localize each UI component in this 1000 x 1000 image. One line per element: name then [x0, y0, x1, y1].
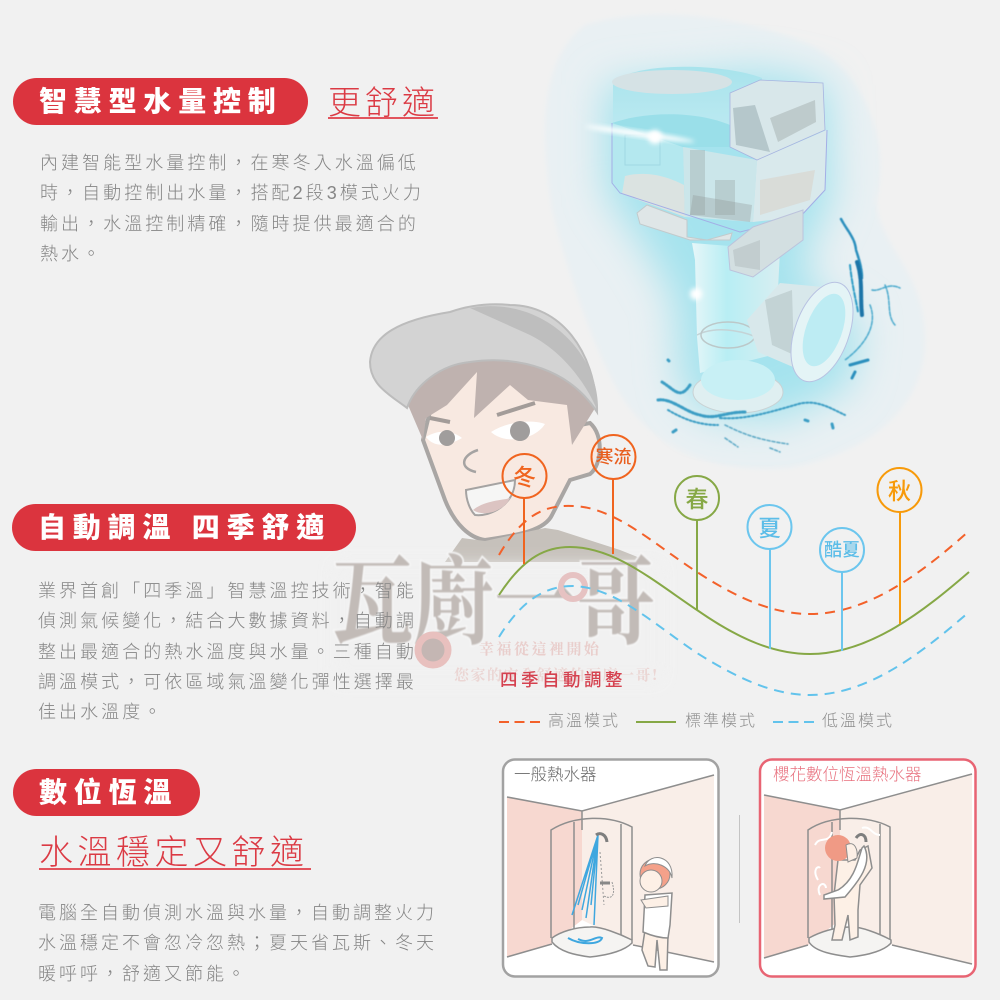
tank lower body — [612, 123, 685, 217]
body text: smart control: 時，自動控制出水量，搭配2段3模式火力 — [40, 183, 424, 203]
mascot hair — [408, 355, 597, 445]
logo red mark — [418, 635, 448, 665]
body text: smart control: 輸出，水溫控制精確，隨時提供最適合的 — [40, 214, 419, 234]
legend — [499, 712, 894, 730]
marker: spring: 春 — [686, 486, 708, 512]
control housing upper — [730, 80, 825, 160]
high temperature curve — [499, 506, 969, 614]
body text: four seasons: 業界首創「四季溫」智慧溫控技術，智能 — [38, 581, 417, 601]
marker: summer: 夏 — [758, 515, 781, 541]
marker: hot summer — [820, 528, 864, 651]
marker: winter — [502, 454, 546, 564]
marker: spring — [675, 476, 719, 610]
shower head — [856, 835, 866, 842]
marker: cold wave: 寒流 — [596, 447, 632, 467]
panel label: 一般熱水器 — [514, 765, 596, 784]
bathroom walls — [764, 795, 840, 958]
pipe base — [693, 371, 783, 413]
valve block — [728, 210, 803, 277]
divider — [739, 815, 740, 923]
legend: 標準模式 — [685, 713, 757, 730]
body text: digital control: 電腦全自動偵測水溫與水量，自動調整火力 — [38, 903, 437, 923]
body text: digital control — [38, 903, 437, 984]
marker: autumn — [878, 468, 922, 624]
front body — [683, 147, 757, 222]
vertical pipe — [692, 243, 780, 373]
body text: smart control: 內建智能型水量控制，在寒冬入水溫偏低 — [40, 153, 419, 173]
sub heading: stable temperature: 水溫穩定又舒適 — [39, 834, 308, 872]
panel label: 櫻花數位恆溫熱水器 — [773, 765, 922, 784]
bathroom walls — [507, 797, 582, 957]
mascot eyes — [426, 422, 545, 445]
marker: cold wave — [592, 435, 636, 554]
water splash base — [658, 360, 845, 452]
legend: 高溫模式 — [548, 713, 620, 730]
body text: four seasons: 偵測氣候變化，結合大數據資料，自動調 — [38, 611, 417, 631]
heading pill: auto temperature — [12, 504, 356, 551]
heading pill: digital constant temperature — [13, 769, 200, 816]
heading pill: smart water control: 智慧型水量控制 — [39, 86, 283, 117]
light flares — [585, 123, 695, 145]
inner blue glow — [605, 70, 860, 420]
marker: autumn: 秋 — [888, 478, 911, 504]
sub heading: more comfortable: 更舒適 — [328, 84, 439, 121]
marker: summer — [748, 505, 792, 649]
body text: four seasons: 調溫模式，可依區域氣溫變化彈性選擇最 — [38, 672, 417, 692]
logo slogan: 幸福從這裡開始 — [479, 638, 602, 659]
body text: digital control: 水溫穩定不會忽冷忽熱；夏天省瓦斯、冬天 — [38, 933, 437, 953]
heading pill: smart water control — [13, 78, 308, 125]
right lower body — [753, 130, 827, 222]
shower head — [596, 834, 607, 842]
mascot mouth — [466, 480, 515, 515]
marker: winter: 冬 — [513, 464, 536, 490]
body text: four seasons: 整出最適合的熱水溫度與水量。三種自動 — [38, 642, 417, 662]
pale outer halo — [545, 15, 925, 469]
body text: smart control: 熱水。 — [40, 244, 103, 264]
watermark: mascot and logo: 您家的安全舒適伯瓦廚一哥! — [454, 664, 659, 685]
heading pill: digital constant temperature: 數位恆溫 — [39, 777, 178, 808]
mascot nose — [464, 450, 478, 472]
water splash right — [841, 219, 900, 378]
legend: 低溫模式 — [822, 713, 894, 730]
shower enclosure — [551, 818, 632, 940]
mascot collar — [445, 528, 650, 562]
logo calligraphy: 瓦廚一哥 — [332, 524, 656, 664]
chart title: 四季自動調整 — [500, 670, 626, 690]
standard curve — [499, 547, 969, 654]
tank upper cylinder — [613, 67, 762, 135]
low temperature curve — [499, 586, 969, 695]
marker: hot summer: 酷夏 — [824, 540, 860, 560]
mascot cap — [370, 304, 597, 412]
faucet — [600, 882, 610, 884]
mascot face — [423, 360, 600, 540]
water spray — [568, 835, 604, 943]
steam — [815, 827, 880, 895]
tank band — [612, 114, 730, 147]
mounting flange — [637, 205, 732, 240]
woman in towel — [642, 930, 668, 970]
body text: four seasons: 佳出水溫度。 — [38, 702, 164, 722]
shower enclosure — [808, 818, 890, 940]
woman showering — [832, 846, 872, 940]
body text: four seasons — [38, 581, 417, 722]
side outlet — [747, 283, 835, 370]
body text: smart control — [40, 153, 424, 264]
heading pill: auto temperature: 自動調溫 四季舒適 — [38, 512, 331, 543]
logo white panel — [335, 564, 660, 680]
body text: digital control: 暖呼呼，舒適又節能。 — [38, 964, 248, 984]
